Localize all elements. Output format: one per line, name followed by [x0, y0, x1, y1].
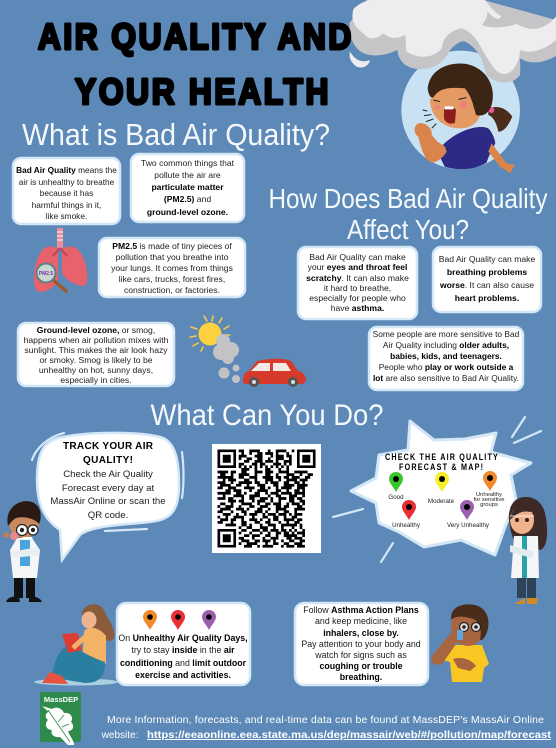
illustration: boy doctor: [3, 501, 42, 602]
text box: asthma action plans: inhalers, close by.: [323, 628, 399, 638]
text box: PM2.5: pollution that you breathe into: [116, 252, 229, 262]
text box: breathing and heart problems: Bad Air Quality can make: [439, 254, 535, 264]
text box: asthma action plans: watch for signs such as: [314, 650, 407, 660]
speech bubble: track your air quality: Check the Air Quality: [63, 469, 153, 480]
text box: PM2.5: like cars, trucks, forest fires,: [119, 274, 225, 284]
text box: breathing and heart problems: worse. It can also cause: [439, 280, 534, 290]
text box: asthma action plans: [295, 603, 428, 685]
text box: ground-level ozone: unhealthy on hot, sunny days,: [39, 365, 153, 375]
illustration: coughing girl in circle: [401, 51, 520, 173]
text box: ground-level ozone: especially in cities.: [60, 375, 132, 385]
heading: What is Bad Air Quality?: What is Bad Air Quality?: [22, 117, 330, 152]
text box: unhealthy air quality days: On Unhealthy Air Quality Days,: [118, 633, 248, 643]
speech bubble: track your air quality: QUALITY!: [83, 455, 133, 466]
text box: sensitive groups: Some people are more sensitive to Bad: [373, 329, 520, 339]
text box: bad air quality definition: harmful things in it,: [32, 200, 101, 210]
speech bubble: track your air quality: MassAir Online or scan the: [50, 496, 166, 507]
text box: PM2.5: PM2.5 is made of tiny pieces of: [112, 241, 232, 251]
icon: sun: [190, 316, 230, 351]
text box: PM2.5: [99, 238, 245, 297]
text box: unhealthy air quality days: [117, 603, 250, 685]
text box: breathing and heart problems: heart problems.: [455, 293, 519, 303]
text box: PM2.5: your lungs. It comes from things: [111, 263, 233, 273]
title: [38, 17, 351, 112]
pin: very unhealthy: [447, 500, 490, 529]
text box: eyes and throat: [298, 247, 417, 319]
text box: eyes and throat: especially for people who: [309, 293, 406, 303]
pin: moderate: [428, 472, 455, 505]
footer text: https://eeaonline.eea.state.ma.us/dep/massair/web/#/pollution/map/forecast: [147, 730, 552, 741]
pin: moderate: Moderate: [428, 498, 455, 505]
text box: sensitive groups: Air Quality including older adults,: [383, 340, 509, 350]
pin: unhealthy for sensitive groups: [474, 471, 504, 508]
text box: sensitive groups: babies, kids, and teenagers.: [390, 351, 502, 361]
icon: lungs with magnifier: PM2.5: [39, 271, 53, 277]
text box: unhealthy air quality days: conditioning and limit outdoor: [120, 658, 247, 668]
heading: How Does Bad Air Quality Affect You?: Affect You?: [347, 214, 469, 245]
text box: eyes and throat: Bad Air Quality can make: [309, 252, 406, 262]
text box: ground-level ozone: sunlight. This makes the air look hazy: [24, 345, 168, 355]
pins: orange, red, purple: [143, 610, 216, 630]
speech bubble: track your air quality: Forecast every day at: [62, 483, 154, 494]
text box: eyes and throat: have asthma.: [331, 303, 384, 313]
text box: unhealthy air quality days: try to stay inside in the air: [131, 645, 235, 655]
text box: PM2.5: construction, or factories.: [124, 285, 220, 295]
text box: ground-level ozone: happens when air pollution mixes with: [24, 335, 169, 345]
starburst: check the forecast and map: [333, 417, 541, 562]
pin: very unhealthy: Very Unhealthy: [447, 522, 490, 529]
text box: two common pollutants: particulate matter: [151, 182, 224, 192]
starburst: check the forecast and map: CHECK THE AIR QUALITY: [385, 452, 498, 462]
text box: asthma action plans: and keep medicine, like: [315, 616, 407, 626]
logo: MassDEP: [40, 692, 81, 745]
title: AIR QUALITY AND: [38, 17, 351, 57]
text box: ground-level ozone: [18, 323, 174, 386]
text box: unhealthy air quality days: exercise and activities.: [135, 670, 231, 680]
text box: two common pollutants: Two common things that: [141, 158, 235, 168]
title: YOUR HEALTH: [75, 72, 328, 112]
text box: bad air quality definition: like smoke.: [46, 211, 87, 221]
text box: sensitive groups: People who play or work outside a: [379, 362, 514, 372]
icon: exhaust smoke: [213, 334, 240, 383]
text box: ground-level ozone: or smoky. Smog is likely to be: [39, 355, 153, 365]
pin: good: Good: [388, 494, 404, 501]
pin: unhealthy: [392, 500, 421, 529]
text box: eyes and throat: your eyes and throat feel: [308, 262, 407, 272]
illustration: boy with inhaler: [431, 604, 489, 682]
text box: breathing and heart problems: breathing problems: [447, 267, 527, 277]
text box: sensitive groups: lot are also sensitive to Bad Air Quality.: [373, 373, 519, 383]
heading: What Can You Do?: What Can You Do?: [150, 399, 384, 432]
pin: unhealthy: Unhealthy: [392, 522, 421, 529]
pin: good: [388, 472, 404, 501]
text box: ground-level ozone: Ground-level ozone, or smog,: [37, 325, 155, 335]
text box: breathing and heart problems: [433, 247, 541, 312]
text box: bad air quality definition: because it has: [40, 188, 93, 198]
pin: unhealthy for sensitive groups: groups: [480, 502, 498, 508]
pin: unhealthy for sensitive groups: Unhealthy: [476, 492, 502, 498]
speech bubble: track your air quality: QR code.: [88, 510, 128, 521]
text box: eyes and throat: it hard to breathe,: [324, 283, 391, 293]
text box: asthma action plans: breathing.: [340, 672, 382, 682]
speech bubble: track your air quality: [32, 433, 184, 560]
starburst: check the forecast and map: FORECAST & MAP!: [399, 462, 483, 472]
illustration: girl reading: [34, 604, 118, 686]
logo: MassDEP: MassDEP: [44, 695, 78, 704]
icon: red car: [243, 359, 306, 387]
text box: asthma action plans: Pay attention to your body and: [301, 639, 421, 649]
speech bubble: track your air quality: TRACK YOUR AIR: [63, 441, 154, 452]
pin: unhealthy for sensitive groups: for sensitive: [474, 497, 504, 503]
illustration: smoke cloud: [349, 0, 556, 82]
text box: two common pollutants: (PM2.5) and: [164, 194, 211, 204]
text box: bad air quality definition: air is unhealthy to breathe: [19, 177, 115, 187]
illustration: woman doctor: [509, 497, 547, 604]
footer text: More Information, forecasts, and real-time data can be found at MassDEP's MassAir Online: [107, 714, 544, 726]
icon: lungs with magnifier: [34, 228, 87, 292]
QR code: [212, 444, 321, 553]
footer text: website:: [101, 730, 138, 741]
text box: asthma action plans: Follow Asthma Action Plans: [303, 605, 419, 615]
footer text: [101, 714, 552, 741]
heading: How Does Bad Air Quality Affect You?: [268, 183, 548, 245]
text box: eyes and throat: scratchy. It can also make: [306, 273, 409, 283]
text box: bad air quality definition: [13, 158, 120, 224]
text box: bad air quality definition: Bad Air Quality means the: [16, 165, 117, 175]
text box: two common pollutants: [131, 154, 244, 222]
text box: asthma action plans: coughing or trouble: [319, 661, 403, 671]
text box: two common pollutants: pollute the air are: [154, 170, 221, 180]
text box: two common pollutants: ground-level ozone.: [147, 207, 228, 217]
text box: sensitive groups: [369, 327, 523, 390]
